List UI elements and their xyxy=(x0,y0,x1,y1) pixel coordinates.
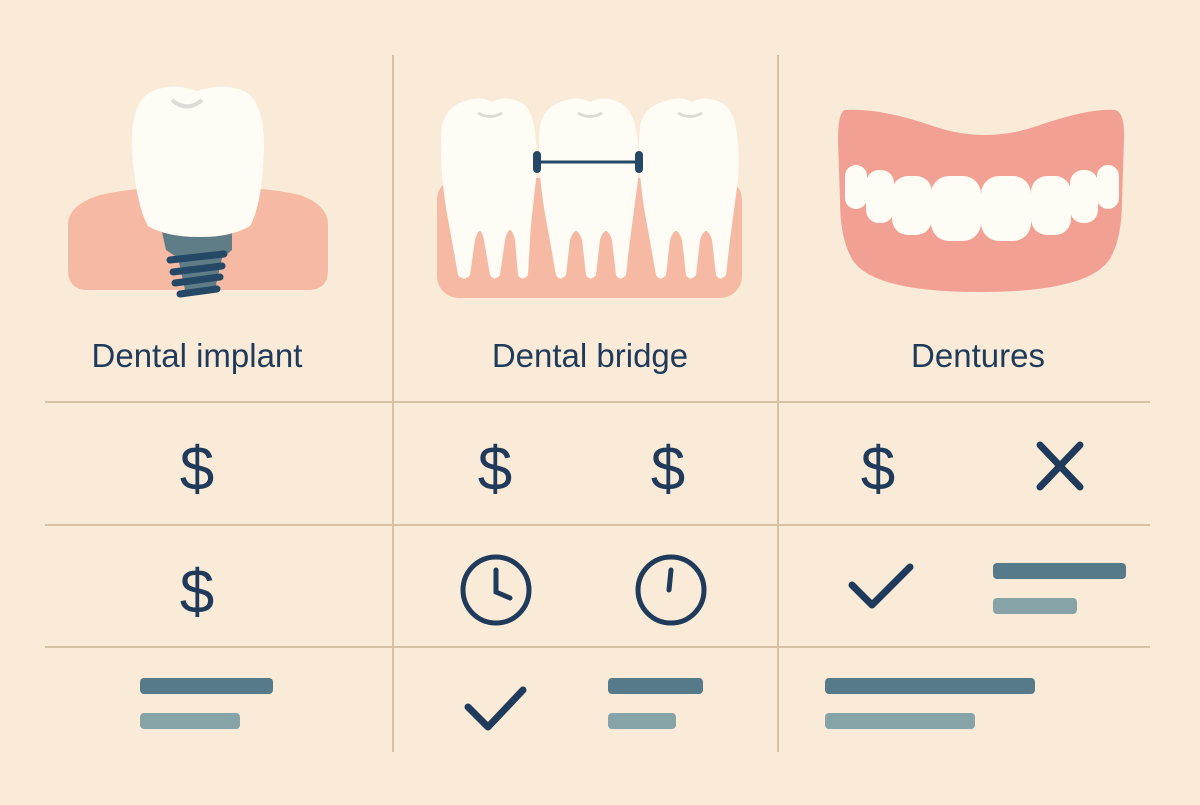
bars: bridge row3 xyxy=(608,678,703,729)
icon: dollar bridge row1 a: $ xyxy=(478,435,512,504)
icon: dentures xyxy=(838,110,1124,292)
heading: dental bridge: Dental bridge xyxy=(492,337,688,374)
heading: dental implant: Dental implant xyxy=(92,337,302,374)
bars: dentures row2 xyxy=(993,563,1126,614)
icon: cross xyxy=(1040,445,1080,487)
icon: check dentures xyxy=(852,567,910,605)
icon: dollar implant row1: $ xyxy=(180,435,214,504)
bars: dentures row3 xyxy=(825,678,1035,729)
icon: clock 2 xyxy=(638,557,704,623)
bars: implant row3 xyxy=(140,678,273,729)
icon: clock 1 xyxy=(463,557,529,623)
icon: dollar dentures row1: $ xyxy=(861,435,895,504)
icon: dental implant xyxy=(68,87,328,294)
icon: check bridge xyxy=(468,690,523,727)
icon: dollar bridge row1 b: $ xyxy=(651,435,685,504)
icon: dollar implant row2: $ xyxy=(180,558,214,627)
icon: dental bridge xyxy=(437,98,742,298)
heading: dentures: Dentures xyxy=(911,337,1045,374)
